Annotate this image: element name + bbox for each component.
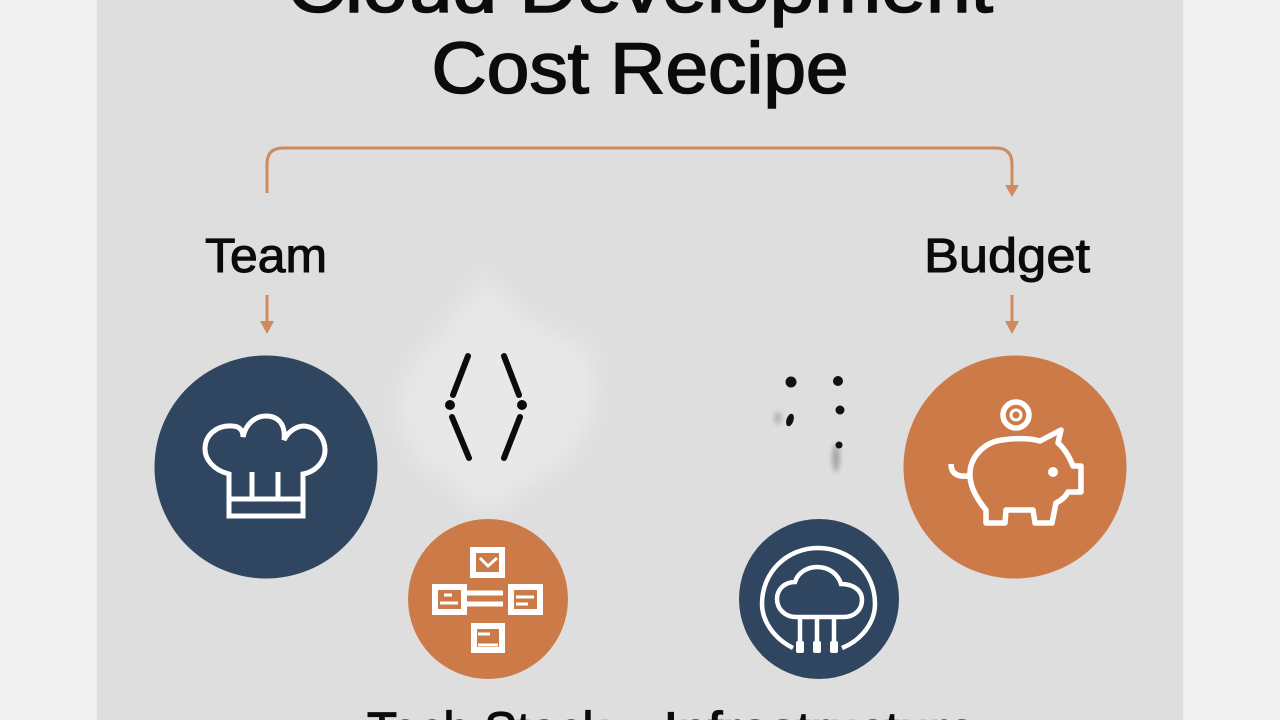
circle: tech stack [408,519,568,679]
icon: code brackets [447,356,525,458]
pale drop shape [399,272,596,518]
icon: piggy bank [951,402,1081,523]
icon: connected boxes [435,550,540,650]
circle: infrastructure [739,519,899,679]
icon: scattered dots [774,376,844,472]
arrow: team down [260,295,274,334]
icon: cloud in ring [762,548,875,653]
label: Team: Team [205,230,327,283]
icon: chef hat [205,416,325,516]
circle: team chef hat [154,356,378,578]
title [287,0,993,109]
arrow: team to budget bracket [267,148,1019,197]
label: Budget: Budget [924,230,1090,283]
title: Cost Recipe [432,29,848,109]
circle: budget piggy bank [904,356,1126,578]
arrow: budget down [1005,295,1019,334]
